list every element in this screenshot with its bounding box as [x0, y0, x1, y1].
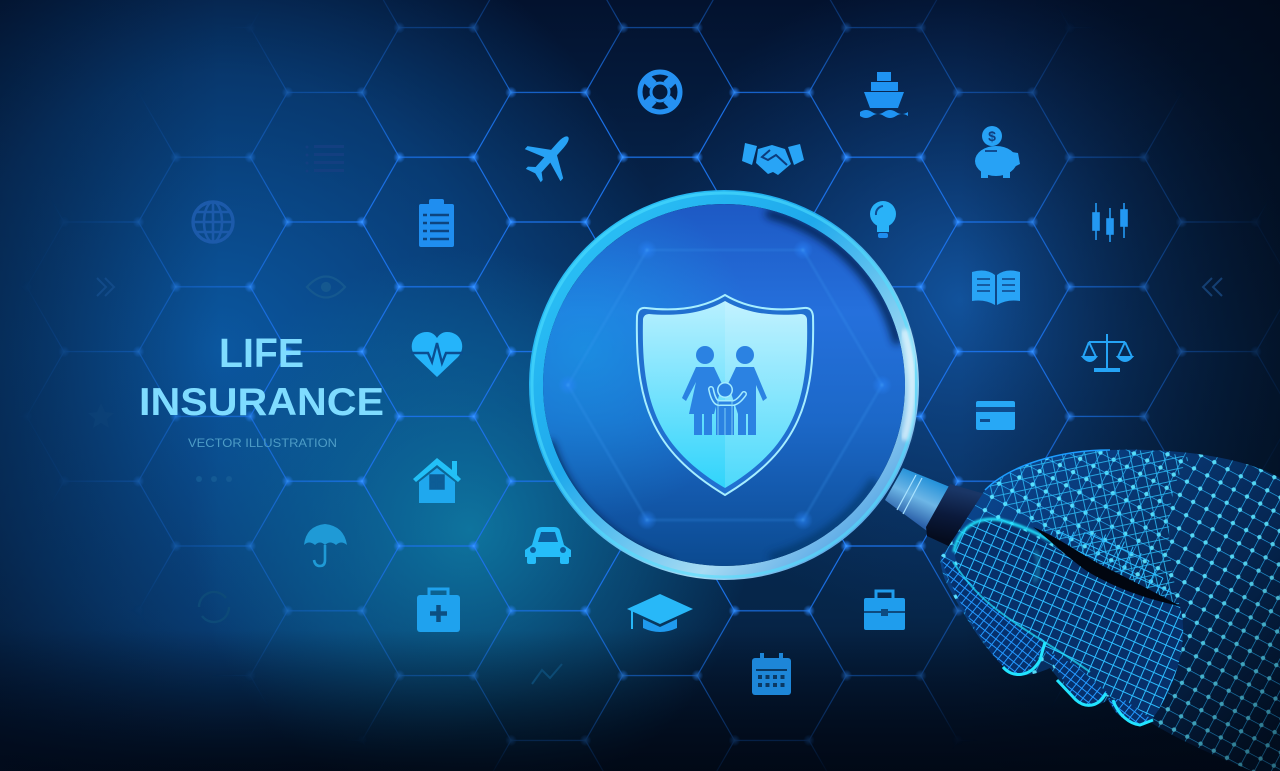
icon: list (faint) [306, 145, 344, 172]
icon: clipboard checklist [419, 199, 454, 247]
icon: light bulb [870, 201, 896, 238]
icon: graduation cap [627, 594, 693, 632]
icon: credit card [976, 401, 1015, 430]
title: life insurance: INSURANCE [139, 381, 384, 424]
icon: open book [972, 271, 1020, 305]
icon: arrows right (faint) [97, 278, 114, 296]
icon: car [525, 527, 571, 564]
gap between thumb and finger [1033, 527, 1180, 606]
icon: briefcase [864, 591, 905, 630]
upper knuckle mesh [985, 450, 1190, 607]
lower fingers fine mesh [941, 556, 1045, 674]
icon: dots (faint) [196, 476, 232, 482]
icon: piggy bank with coin [975, 126, 1020, 178]
icon: handshake [742, 143, 804, 175]
magnifying glass [532, 193, 1042, 577]
icon: arrows left (faint) [1203, 278, 1222, 296]
icon: star (faint) [88, 403, 114, 428]
handle [926, 484, 1042, 549]
subtitle: vector illustration: VECTOR ILLUSTRATION [188, 436, 337, 450]
icon: refresh (faint) [199, 592, 229, 622]
icon: candlestick chart [1093, 203, 1127, 242]
icon: ship [860, 72, 908, 118]
icon: first aid kit [417, 589, 460, 632]
lens ring [532, 193, 916, 577]
icon: heart with pulse [411, 332, 463, 377]
title: life insurance [139, 330, 384, 424]
icon: airplane [515, 121, 586, 192]
wireframe hand [940, 450, 1280, 771]
shield with family [637, 295, 813, 495]
icon: house [413, 458, 461, 503]
icon: globe [193, 202, 233, 242]
icon: eye (faint) [307, 276, 345, 298]
glowing finger outlines [953, 450, 1153, 725]
hand silhouette body mesh [940, 450, 1280, 771]
lens glass [543, 204, 905, 566]
thumb pocket mesh [1045, 530, 1175, 600]
title: life insurance: LIFE [219, 330, 304, 376]
icon: life buoy [640, 72, 680, 112]
icon: umbrella [304, 524, 347, 566]
icon: small chart (faint) [532, 664, 562, 684]
highlight glow on finger [1034, 550, 1039, 582]
family figures [682, 346, 767, 435]
index finger fine mesh [954, 520, 1183, 722]
icon: justice scales [1083, 334, 1132, 372]
icon: calendar [752, 653, 791, 695]
ferrule [885, 468, 950, 531]
icon: piggy bank with coin: $ [988, 128, 996, 144]
